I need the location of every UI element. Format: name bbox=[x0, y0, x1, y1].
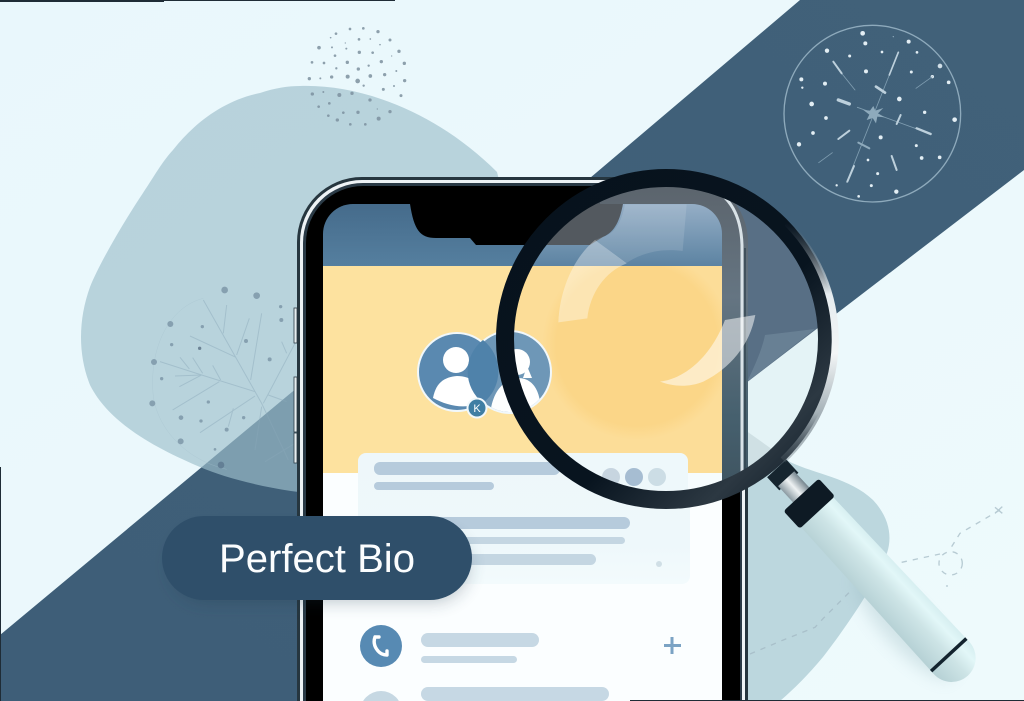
card dots bbox=[656, 561, 662, 567]
phone contact row bbox=[360, 625, 681, 667]
label shadow bbox=[172, 532, 468, 601]
avatar overlap bbox=[468, 340, 498, 403]
card text bars bbox=[374, 462, 630, 565]
avatars: K bbox=[473, 403, 481, 415]
warm glare circle bbox=[549, 266, 722, 432]
Perfect Bio label bbox=[162, 516, 472, 600]
band seen through lens bbox=[590, 204, 818, 382]
screen header bbox=[323, 204, 524, 266]
upper-left highlight bbox=[558, 204, 755, 386]
plus icon bbox=[664, 637, 681, 654]
blob seen through lens bbox=[748, 432, 771, 467]
yellow through lens bbox=[500, 266, 722, 473]
badge bbox=[466, 398, 488, 418]
phone screen bbox=[323, 204, 722, 701]
right person bbox=[491, 384, 512, 412]
notch through lens bbox=[546, 204, 623, 245]
side buttons bbox=[294, 308, 750, 463]
Perfect Bio label: Perfect Bio bbox=[219, 537, 415, 581]
dots through lens bbox=[602, 468, 666, 486]
second contact row bbox=[360, 687, 609, 701]
magnifying glass handle bbox=[759, 452, 986, 692]
bio card bbox=[358, 453, 690, 584]
magnifying glass rim bbox=[505, 178, 835, 500]
white lower screen bbox=[323, 473, 722, 701]
header through lens bbox=[532, 204, 722, 266]
left organic blob bbox=[81, 86, 560, 495]
avatars bbox=[417, 332, 514, 418]
bezel through lens bbox=[600, 187, 748, 480]
smartphone bbox=[294, 177, 750, 701]
starburst circle emblem bbox=[784, 25, 961, 202]
yellow cover bbox=[323, 266, 540, 473]
handle shadow bbox=[841, 559, 969, 691]
dashed route line bbox=[750, 507, 1002, 654]
phone frame bbox=[297, 177, 748, 701]
lens view bbox=[514, 187, 818, 480]
phone icon bbox=[374, 637, 387, 655]
white screen and card through lens bbox=[688, 473, 722, 490]
rim silver highlight bbox=[783, 223, 835, 460]
left person bbox=[433, 347, 478, 406]
tree sketch on blob bbox=[149, 287, 295, 469]
right organic blob bbox=[745, 430, 889, 701]
glass highlight on band bbox=[747, 329, 815, 382]
notch bbox=[410, 204, 562, 245]
dot cluster top bbox=[308, 27, 406, 126]
lower-right highlight bbox=[660, 315, 755, 386]
avatar through lens bbox=[514, 330, 552, 408]
